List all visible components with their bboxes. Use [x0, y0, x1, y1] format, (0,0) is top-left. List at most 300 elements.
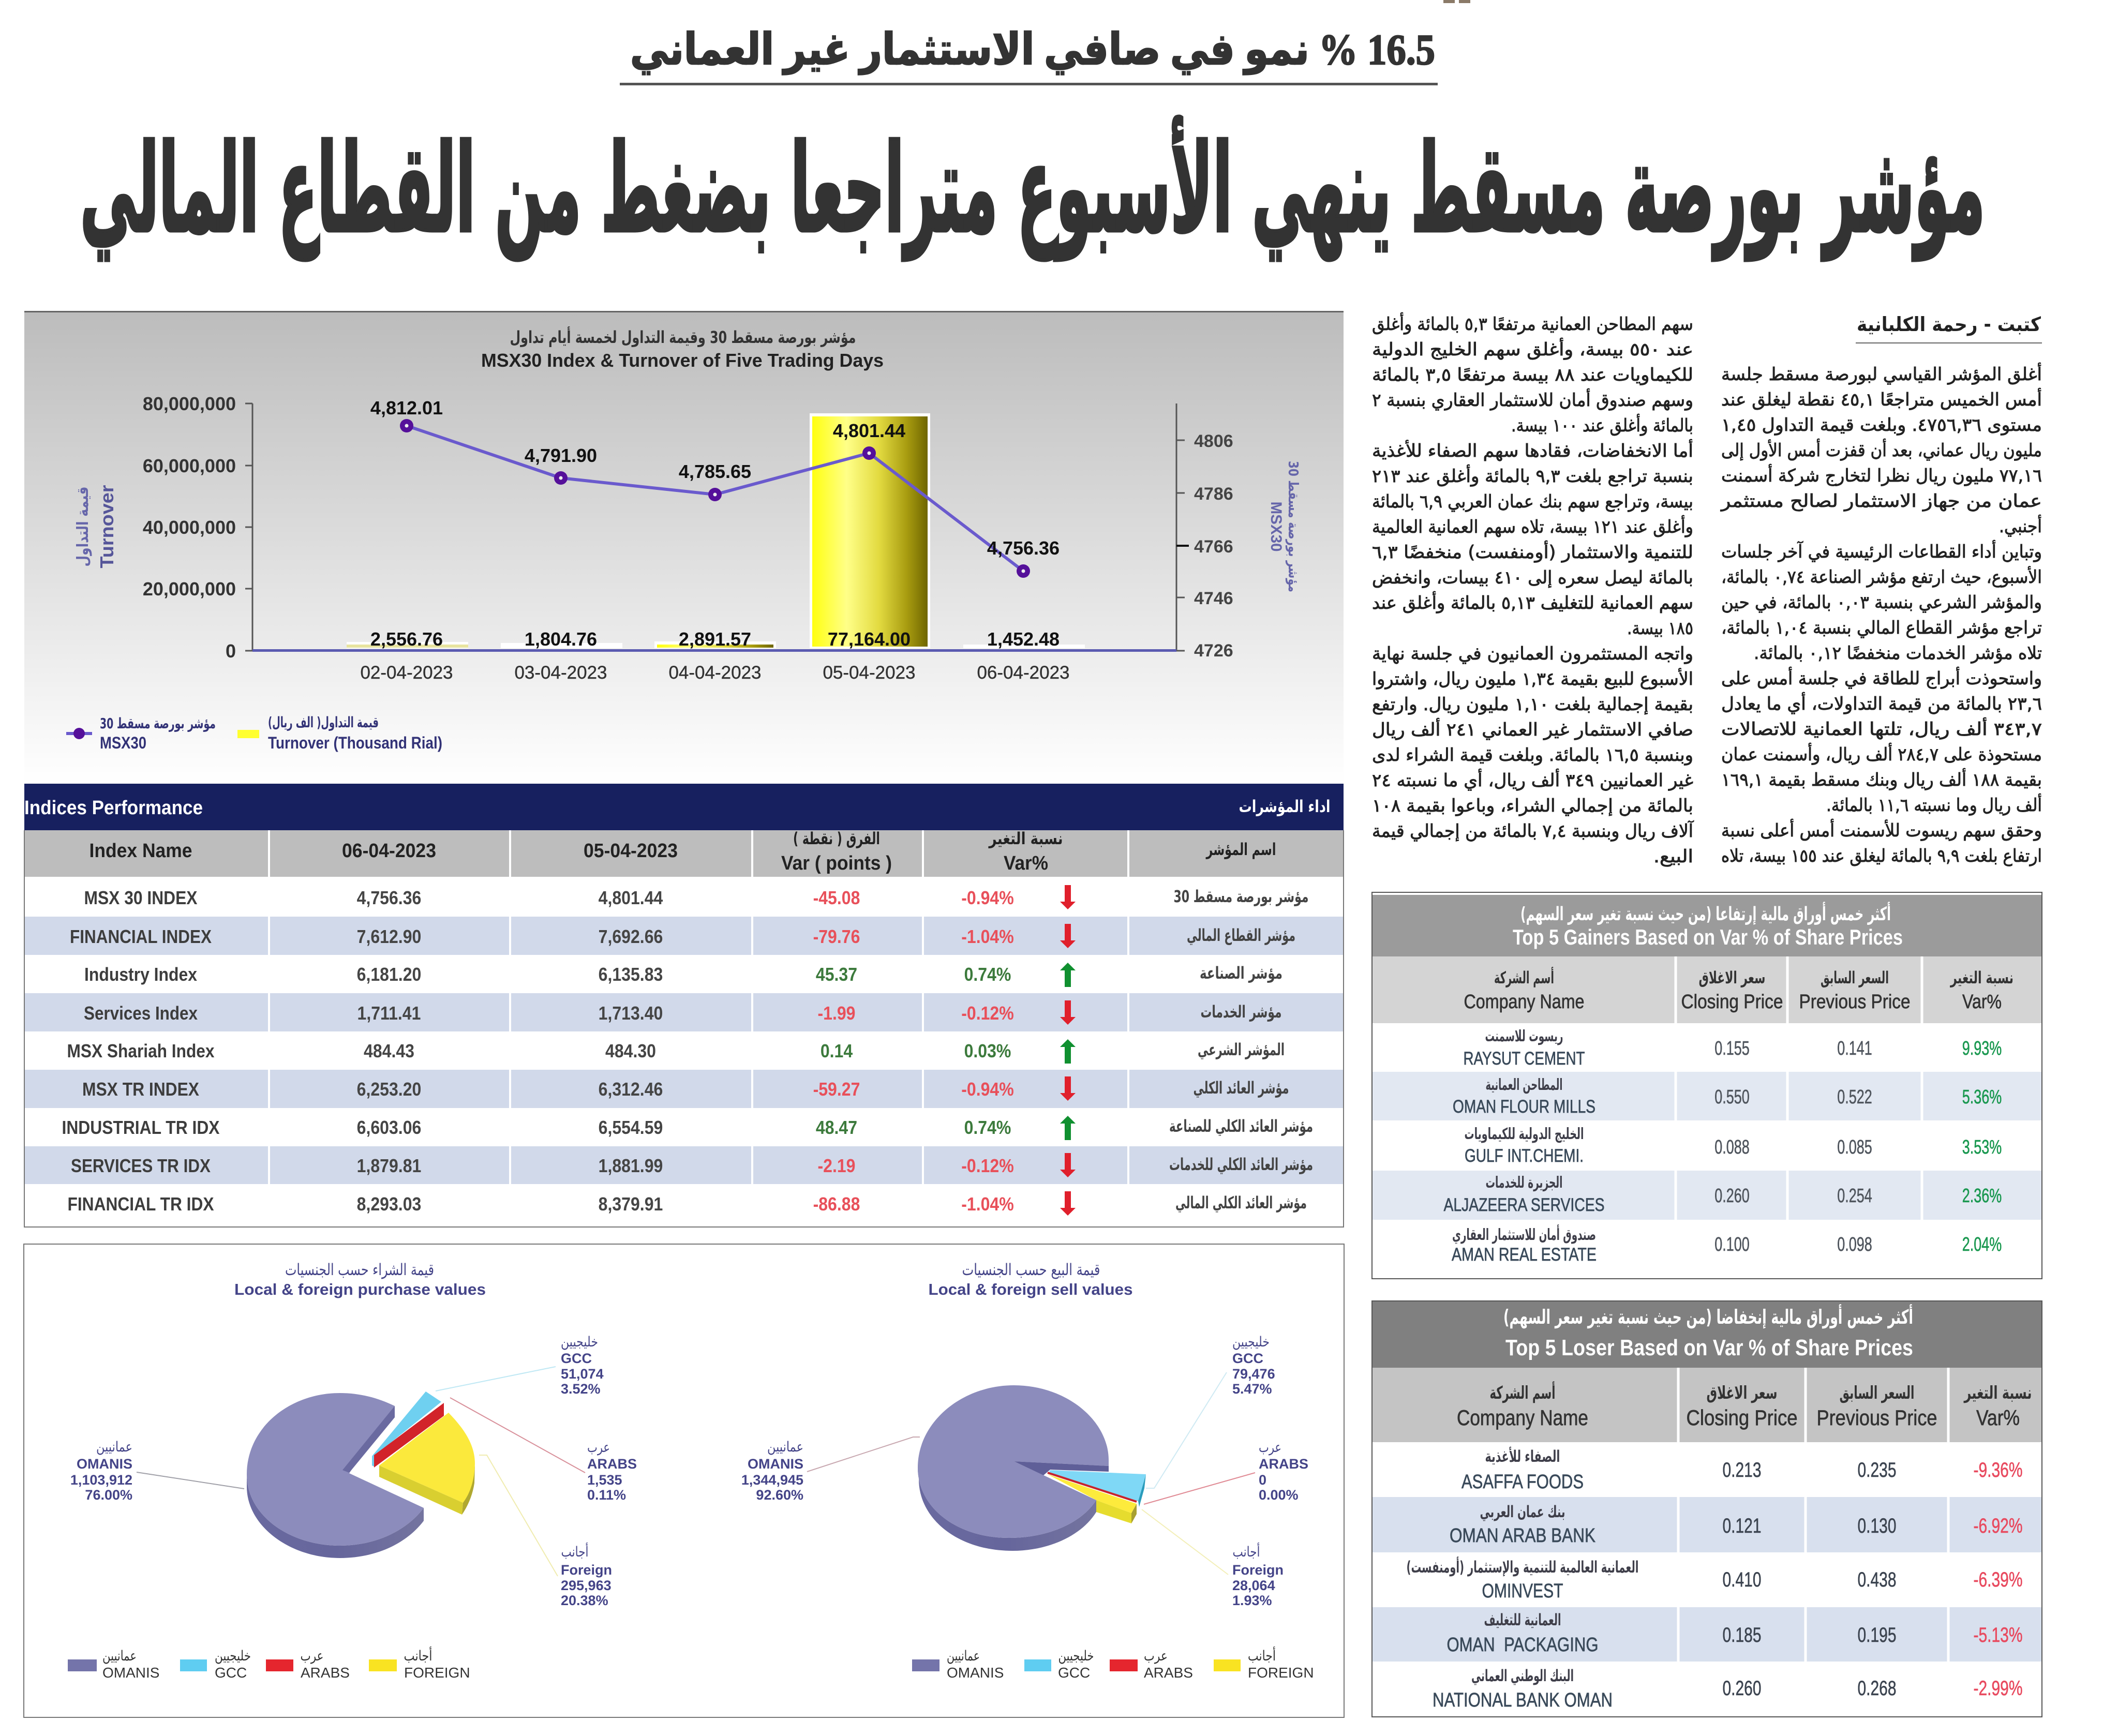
panel: indices performance table — [24, 784, 1344, 1227]
article byline: كتبت - رحمة الكلبانية — [1857, 313, 2041, 336]
purchase pie — [247, 1391, 475, 1558]
right axis: 4746 — [1194, 589, 1233, 608]
article column 1: تلاه مؤشر الخدمات منخفضًا ٠,١٢ بالمائة. — [1754, 643, 2042, 664]
gainer: Aman Real Estate — [1452, 1224, 2002, 1265]
loser: Oman Arab Bank: -6.92% — [1973, 1515, 2023, 1537]
sell heading — [928, 1261, 1133, 1298]
left axis title: قيمة التداول — [74, 486, 92, 567]
article column 2: سهم العمانية للتغليف ٥,١٣ بالمائة وأغلق عند — [1372, 591, 1693, 613]
article column 2: بالمائة ليصل سعره إلى ٤١٠ بيسات، وانخفض — [1372, 567, 1693, 588]
article column 1: واستحوذت أبراج للطاقة في جلسة أمس على — [1721, 667, 2042, 689]
gainer: Aljazeera Services: 0.260 — [1714, 1184, 1750, 1206]
article column 1: بقيمة ١٨٨ ألف ريال وبنك مسقط بقيمة ١٦٩,١ — [1721, 768, 2042, 790]
row: FINANCIAL TR IDX — [67, 1191, 1307, 1216]
article column 1: تراجع مؤشر القطاع المالي بنسبة ١,٠٤ بالمائة، — [1721, 618, 2042, 638]
article column 2 — [1372, 312, 1694, 867]
row: FINANCIAL INDEX: -79.76 — [813, 926, 860, 947]
row: MSX TR INDEX: -59.27 — [813, 1079, 860, 1100]
gainer: Oman Flour Mills — [1453, 1076, 2002, 1117]
label: Arabs sell: 0.00% — [1259, 1487, 1299, 1503]
index value labels: 4,812.01 — [370, 397, 443, 418]
row: Services Index: -0.12% — [961, 1003, 1014, 1024]
gainer: Raysut Cement: 9.93% — [1962, 1037, 2002, 1059]
sell legend — [912, 1646, 1314, 1681]
gainer: Oman Flour Mills: 0.550 — [1714, 1085, 1750, 1108]
gainer: Raysut Cement: 0.141 — [1837, 1037, 1872, 1059]
row: Services Index: Services Index — [84, 1002, 198, 1024]
label: Arabs purchase: ARABS — [587, 1456, 637, 1472]
label: Foreign purchase: أجانب — [561, 1542, 589, 1560]
table header: Var% — [1004, 852, 1048, 874]
gainers header — [1372, 956, 2042, 1023]
loser: Oman Packaging: 0.195 — [1857, 1624, 1897, 1647]
article column 1 — [1720, 363, 2042, 866]
label: Omanis purchase: 1,103,912 — [70, 1472, 132, 1488]
label: Arabs sell: ARABS — [1259, 1456, 1308, 1472]
x axis with dates: 04-04-2023 — [668, 663, 762, 683]
loser: National Bank Oman: 0.260 — [1722, 1677, 1762, 1700]
row: Services Index — [84, 1000, 1282, 1025]
article column 1: عمان من جهاز الاستثمار لصالح مستثمر — [1720, 491, 2042, 512]
row: MSX 30 INDEX: -45.08 — [813, 888, 860, 908]
row: MSX 30 INDEX — [84, 885, 1309, 909]
loser: National Bank Oman: 0.268 — [1857, 1677, 1897, 1700]
gainer: Raysut Cement — [1463, 1027, 2002, 1069]
article column 1: مستوى ٤٧٥٦,٣٦. وبلغت قيمة التداول ١,٤٥ — [1721, 415, 2042, 436]
article column 2: وبنسبة ١٦,٥ بالمائة. وبلغت قيمة الشراء لدى — [1372, 745, 1693, 766]
row: FINANCIAL INDEX: -1.04% — [961, 926, 1014, 947]
sell legend: ARABS — [1144, 1665, 1193, 1681]
gainer: Gulf Int. Chemi.: 0.085 — [1837, 1135, 1872, 1158]
label: GCC purchase: 3.52% — [561, 1381, 601, 1397]
loser: Oman Packaging: 0.185 — [1722, 1624, 1762, 1647]
label: Foreign sell: 28,064 — [1232, 1578, 1275, 1593]
label: GCC sell — [1232, 1334, 1275, 1397]
purchase heading: قيمة الشراء حسب الجنسيات — [285, 1261, 434, 1279]
loser: National Bank Oman: -2.99% — [1973, 1677, 2023, 1700]
left axis title: Turnover — [96, 485, 117, 568]
row: FINANCIAL TR IDX: 8,379.91 — [599, 1194, 663, 1215]
row: FINANCIAL INDEX: 7,692.66 — [599, 926, 663, 947]
loser: Asaffa Foods: الصفاء للأغذية — [1485, 1446, 1560, 1466]
row: MSX TR INDEX: MSX TR INDEX — [82, 1079, 199, 1100]
gainer: Aljazeera Services: 0.254 — [1837, 1184, 1872, 1206]
label: Foreign sell — [1232, 1542, 1284, 1608]
row: Industry Index: مؤشر الصناعة — [1200, 963, 1282, 983]
article column 1: الأسبوع، حيث ارتفع مؤشر الصناعة ٠,٧٤ بالمائة، — [1721, 566, 2042, 588]
article column 2: ١٨٥ بيسة. — [1627, 618, 1693, 639]
chart legend: مؤشر بورصة مسقط 30 — [100, 715, 216, 732]
row: INDUSTRIAL TR IDX: 0.74% — [964, 1117, 1011, 1138]
article column 2: للتنمية والاستثمار (أومنفست) منخفضًا ٦,٣ — [1372, 541, 1693, 563]
gainer: Aljazeera Services: 2.36% — [1962, 1184, 2002, 1206]
row: SERVICES TR IDX — [71, 1153, 1313, 1177]
gainers title — [1372, 895, 2042, 956]
row: Industry Index: 6,181.20 — [357, 964, 421, 985]
row: MSX Shariah Index: المؤشر الشرعي — [1198, 1040, 1285, 1059]
loser: Oman Arab Bank: 0.130 — [1857, 1515, 1897, 1537]
sell legend: أجانب — [1248, 1646, 1276, 1664]
label: GCC sell: خليجيين — [1232, 1334, 1270, 1350]
label: Foreign purchase: 295,963 — [561, 1578, 611, 1593]
loser: National Bank Oman: NATIONAL BANK OMAN — [1433, 1689, 1613, 1711]
row: INDUSTRIAL TR IDX: 48.47 — [816, 1117, 857, 1138]
article column 2: الأسبوع للبيع بقيمة ١,٣٤ مليون ريال، واشتروا — [1372, 668, 1693, 690]
row: FINANCIAL TR IDX: -1.04% — [961, 1194, 1014, 1215]
losers header: Previous Price — [1817, 1405, 1937, 1430]
turnover value labels: 1,452.48 — [987, 628, 1060, 650]
table header: Index Name — [89, 840, 192, 862]
gainer: Aman Real Estate: 0.100 — [1714, 1233, 1750, 1255]
row: INDUSTRIAL TR IDX: مؤشر العائد الكلي للصناعة — [1169, 1116, 1313, 1136]
row: MSX 30 INDEX: مؤشر بورصة مسقط 30 — [1173, 887, 1309, 906]
left axis: 0 — [226, 640, 236, 662]
purchase legend: GCC — [215, 1665, 247, 1681]
loser: Oman Arab Bank: OMAN ARAB BANK — [1450, 1525, 1595, 1547]
right axis — [1176, 403, 1233, 661]
gainer: Oman Flour Mills: المطاحن العمانية — [1486, 1076, 1562, 1094]
loser: National Bank Oman — [1433, 1667, 2023, 1711]
article column 2: سهم المطاحن العمانية مرتفعًا ٥,٣ بالمائة وأغلق — [1372, 312, 1693, 335]
label: Omanis sell: عمانيين — [767, 1439, 803, 1455]
row: Industry Index — [84, 963, 1282, 987]
gainer: Aljazeera Services — [1443, 1174, 2002, 1215]
row: Industry Index: 45.37 — [816, 964, 857, 985]
label: GCC sell: 5.47% — [1232, 1381, 1272, 1397]
label: Arabs sell — [1259, 1440, 1308, 1503]
losers header: نسبة التغير — [1963, 1383, 2032, 1403]
left axis title — [74, 485, 117, 568]
table title bar — [24, 784, 1344, 830]
label: Omanis sell: 1,344,945 — [741, 1472, 803, 1488]
gainer: Raysut Cement: ريسوت للاسمنت — [1485, 1027, 1563, 1045]
label: Foreign purchase: Foreign — [561, 1562, 612, 1578]
index value labels: 4,801.44 — [833, 420, 905, 441]
row: FINANCIAL TR IDX: 8,293.03 — [357, 1194, 421, 1215]
loser: Ominvest: العمانية العالمية للتنمية والإستثمار (أومنفست) — [1406, 1557, 1639, 1577]
chart legend: MSX30 — [100, 734, 146, 752]
row: MSX TR INDEX: 6,312.46 — [599, 1079, 663, 1100]
row: Industry Index: Industry Index — [84, 964, 197, 985]
losers header: Company Name — [1457, 1405, 1588, 1430]
panel: top 5 gainers — [1372, 892, 2042, 1279]
left axis: 40,000,000 — [143, 517, 236, 538]
article column 1: ارتفاع بلغت ٩,٩ بالمائة ليغلق عند ١٥٥ بيسة، تلاه — [1721, 846, 2042, 866]
index value labels: 4,756.36 — [987, 537, 1060, 559]
row: MSX 30 INDEX: 4,756.36 — [357, 888, 421, 908]
article column 2: بقيمة إجمالية بلغت ١,١٠ مليون ريال. وارتفع — [1372, 694, 1693, 715]
row: Services Index: 1,713.40 — [599, 1003, 663, 1024]
turnover value labels: 2,891.57 — [679, 628, 751, 650]
row: MSX Shariah Index — [67, 1039, 1285, 1064]
label: Omanis sell: OMANIS — [748, 1456, 803, 1472]
gainers header: نسبة التغير — [1950, 968, 2013, 987]
row: SERVICES TR IDX: SERVICES TR IDX — [71, 1155, 211, 1176]
index value labels: 4,785.65 — [679, 461, 751, 482]
gainer: Aljazeera Services: ALJAZEERA SERVICES — [1443, 1195, 1605, 1215]
gainer: Aljazeera Services: الجزيرة للخدمات — [1486, 1174, 1562, 1192]
label: Omanis purchase: OMANIS — [77, 1456, 132, 1472]
table header — [24, 829, 1344, 877]
gainer: Gulf Int. Chemi.: 3.53% — [1962, 1135, 2002, 1158]
panel: top 5 losers — [1372, 1301, 2042, 1717]
article column 2: أما الانخفاضات، فقادها سهم الصفاء للأغذية — [1372, 439, 1693, 461]
losers header: أسم الشركة — [1490, 1381, 1555, 1403]
loser: Asaffa Foods — [1461, 1446, 2023, 1493]
label: GCC purchase: 51,074 — [561, 1366, 604, 1382]
table header: الفرق ( نقطة ) — [793, 829, 880, 848]
row: FINANCIAL INDEX — [70, 924, 1295, 948]
label: Arabs purchase: عرب — [587, 1440, 610, 1456]
loser: Oman Packaging — [1446, 1611, 2023, 1656]
table header: 06-04-2023 — [342, 840, 436, 862]
article column 2: آلاف ريال وبنسبة ٧,٤ بالمائة من إجمالي قيمة — [1372, 820, 1694, 842]
purchase legend: أجانب — [404, 1646, 432, 1664]
loser: Oman Packaging: -5.13% — [1973, 1624, 2023, 1647]
gainer: Aman Real Estate: 2.04% — [1962, 1233, 2002, 1255]
sell pie — [918, 1385, 1146, 1551]
article column 1: ٢٣,٦ بالمائة من قيمة التداولات، أي ما يعادل — [1721, 692, 2042, 714]
row: MSX 30 INDEX: MSX 30 INDEX — [84, 887, 198, 908]
chart legend: قيمة التداول( الف ريال) — [268, 714, 379, 731]
article column 1: وحقق سهم ريسوت للأسمنت أمس أعلى نسبة — [1721, 819, 2042, 841]
gainer: Gulf Int. Chemi.: 0.088 — [1714, 1135, 1750, 1158]
MSX30 line — [400, 419, 1030, 578]
loser: Ominvest: 0.438 — [1857, 1568, 1897, 1591]
chart title: MSX30 Index & Turnover of Five Trading Days — [481, 350, 884, 371]
label: Arabs sell: عرب — [1259, 1440, 1281, 1456]
sell heading: قيمة البيع حسب الجنسيات — [962, 1261, 1100, 1279]
article column 2: بيسة، وتراجع سهم بنك عمان العربي ٦,٩ بالمائة — [1372, 491, 1693, 512]
row: Services Index: مؤشر الخدمات — [1200, 1002, 1282, 1022]
chart legend — [66, 714, 442, 752]
gainers header: أسم الشركة — [1494, 967, 1554, 987]
article column 2: واتجه المستثمرون العمانيون في جلسة نهاية — [1372, 643, 1693, 664]
losers header: Closing Price — [1687, 1405, 1797, 1430]
right axis title — [1267, 461, 1301, 592]
purchase legend: ARABS — [301, 1665, 350, 1681]
right axis title: مؤشر بورصة مسقط 30 — [1285, 461, 1301, 592]
loser: Ominvest: OMINVEST — [1482, 1580, 1563, 1602]
article column 2: غير العمانيين ٣٤٩ ألف ريال، أي ما نسبته ٢٤ — [1372, 769, 1693, 791]
losers title — [1372, 1301, 2042, 1368]
row: INDUSTRIAL TR IDX: 6,554.59 — [599, 1117, 663, 1138]
clipped page fragment at top edge — [1443, 0, 1470, 3]
article column 1: ألف ريال وما نسبته ١١,٦ بالمائة. — [1826, 794, 2042, 816]
losers header — [1372, 1368, 2042, 1442]
row: INDUSTRIAL TR IDX — [62, 1116, 1313, 1140]
x axis with dates: 06-04-2023 — [977, 663, 1070, 683]
gainer: Oman Flour Mills: 0.522 — [1837, 1085, 1872, 1108]
article column 1: أجنبي. — [1999, 515, 2042, 537]
row: MSX TR INDEX — [82, 1076, 1289, 1101]
table header: اسم المؤشر — [1205, 840, 1276, 859]
right axis: 4786 — [1194, 484, 1233, 504]
loser: Oman Packaging: العمانية للتغليف — [1484, 1611, 1561, 1629]
gainer: Aman Real Estate: AMAN REAL ESTATE — [1452, 1245, 1597, 1265]
article column 2: عند ٥٥٠ بيسة، وأغلق سهم الخليج الدولية — [1372, 338, 1693, 360]
article column 2: بالمائة وأغلق عند ١٠٠ بيسة. — [1511, 414, 1693, 436]
label: Arabs sell: 0 — [1259, 1472, 1266, 1488]
loser: Asaffa Foods: 0.235 — [1857, 1459, 1897, 1481]
row: SERVICES TR IDX: 1,881.99 — [599, 1156, 663, 1176]
loser: Oman Arab Bank: 0.121 — [1722, 1515, 1762, 1537]
loser: Asaffa Foods: 0.213 — [1722, 1459, 1762, 1481]
label: GCC sell: GCC — [1232, 1351, 1263, 1366]
loser: Oman Arab Bank — [1450, 1503, 2023, 1547]
right axis: 4766 — [1194, 537, 1233, 557]
losers title: Top 5 Loser Based on Var % of Share Prices — [1505, 1335, 1913, 1360]
index value labels: 4,791.90 — [525, 445, 597, 466]
row: FINANCIAL INDEX: 7,612.90 — [357, 926, 421, 947]
article column 1: وتباين أداء القطاعات الرئيسية في آخر جلسات — [1721, 540, 2042, 562]
article column 2: صافي الاستثمار غير العماني ٢٤١ ألف ريال — [1372, 718, 1693, 740]
row: SERVICES TR IDX: 1,879.81 — [357, 1156, 421, 1176]
turnover value labels: 2,556.76 — [370, 628, 443, 650]
label: Omanis purchase — [70, 1439, 132, 1503]
gainers header: Previous Price — [1799, 991, 1910, 1013]
row: FINANCIAL TR IDX: -86.88 — [813, 1194, 860, 1215]
label: Foreign sell: 1.93% — [1232, 1593, 1272, 1608]
left axis — [143, 393, 252, 662]
chart title: مؤشر بورصة مسقط 30 وقيمة التداول لخمسة أيام تداول — [510, 326, 856, 347]
row: FINANCIAL INDEX: مؤشر القطاع المالي — [1187, 925, 1295, 945]
row: FINANCIAL TR IDX: FINANCIAL TR IDX — [67, 1193, 214, 1215]
purchase legend: OMANIS — [102, 1665, 159, 1681]
purchase legend: عمانيين — [102, 1648, 137, 1664]
label: Omanis purchase: عمانيين — [96, 1439, 132, 1455]
loser: Ominvest: 0.410 — [1722, 1568, 1762, 1591]
loser: Oman Arab Bank: بنك عمان العربي — [1480, 1503, 1565, 1521]
article column 2: البيع. — [1653, 846, 1693, 867]
sell legend: GCC — [1058, 1665, 1090, 1681]
left axis: 80,000,000 — [143, 393, 236, 414]
label: Omanis purchase: 76.00% — [85, 1487, 132, 1503]
right axis title: MSX30 — [1267, 502, 1285, 551]
label: GCC purchase: GCC — [561, 1351, 592, 1366]
sell legend: OMANIS — [947, 1665, 1004, 1681]
label: Arabs purchase: 0.11% — [587, 1487, 626, 1503]
gainers header: سعر الاغلاق — [1699, 968, 1765, 987]
row: Services Index: 1,711.41 — [357, 1003, 421, 1024]
row: MSX Shariah Index: 0.14 — [821, 1041, 853, 1061]
gainer: Raysut Cement: 0.155 — [1714, 1037, 1750, 1059]
label: GCC purchase — [561, 1334, 604, 1397]
row: FINANCIAL INDEX: FINANCIAL INDEX — [70, 926, 212, 947]
label: Foreign purchase — [561, 1542, 612, 1608]
losers header: السعر السابق — [1840, 1383, 1914, 1403]
panel: nationality pie charts — [24, 1244, 1344, 1717]
label: Foreign sell: Foreign — [1232, 1562, 1284, 1578]
gainers header: Closing Price — [1681, 991, 1783, 1013]
article column 1: ٣٤٣,٧ ألف ريال، تلتها العمانية للاتصالات — [1721, 717, 2042, 740]
gainer: Aman Real Estate: 0.098 — [1837, 1233, 1872, 1255]
row: MSX TR INDEX: مؤشر العائد الكلي — [1193, 1078, 1289, 1098]
gainer: Aman Real Estate: صندوق أمان للاستثمار العقاري — [1452, 1224, 1596, 1244]
index value labels — [370, 397, 1060, 559]
gainer: Gulf Int. Chemi.: الخليج الدولية للكيماويات — [1464, 1125, 1584, 1143]
article column 2: بالمائة من إجمالي الشراء، وباعوا بقيمة ١٠٨ — [1372, 796, 1693, 816]
label: Omanis sell: 92.60% — [756, 1487, 803, 1503]
article column 2: للكيماويات عند ٨٨ بيسة مرتفعًا ٣,٥ بالمائة — [1372, 365, 1693, 385]
table header: 05-04-2023 — [584, 840, 678, 862]
x axis with dates: 03-04-2023 — [514, 663, 607, 683]
right axis: 4806 — [1194, 431, 1233, 451]
purchase legend: عرب — [300, 1648, 324, 1664]
row: MSX 30 INDEX: 4,801.44 — [599, 888, 663, 908]
row: MSX Shariah Index: 484.30 — [605, 1041, 656, 1061]
turnover bars — [347, 413, 1085, 648]
loser: Oman Packaging: OMAN PACKAGING — [1446, 1634, 1599, 1656]
row: MSX Shariah Index: MSX Shariah Index — [67, 1040, 214, 1061]
subtitle: 16.5 % نمو في صافي الاستثمار غير العماني — [630, 26, 1435, 75]
row: SERVICES TR IDX: -0.12% — [961, 1156, 1014, 1176]
purchase leader lines — [137, 1367, 585, 1576]
chart title — [481, 326, 884, 371]
table title bar: اداء المؤشرات — [1239, 797, 1331, 816]
gainers title: أكثر خمس أوراق مالية إرتفاعا (من حيث نسبة تغير سعر السهم) — [1520, 902, 1891, 925]
table title bar: Indices Performance — [24, 797, 203, 819]
gainer: Gulf Int. Chemi.: GULF INT.CHEMI. — [1465, 1146, 1584, 1166]
row: MSX Shariah Index: 0.03% — [964, 1041, 1011, 1061]
article column 1: ٧٧,١٦ مليون ريال نظرا لتخارج شركة أسمنت — [1721, 464, 2042, 486]
purchase legend — [68, 1646, 470, 1681]
left axis: 20,000,000 — [143, 578, 236, 600]
loser: Ominvest: -6.39% — [1973, 1568, 2023, 1591]
turnover value labels: 77,164.00 — [828, 628, 911, 650]
article column 1: مليون ريال عماني، بعد أن قفزت أمس الأول إلى — [1721, 439, 2042, 461]
gainers title: Top 5 Gainers Based on Var % of Share Prices — [1513, 925, 1903, 949]
x axis with dates: 02-04-2023 — [360, 663, 453, 683]
article column 2: وسهم صندوق أمان للاستثمار العقاري بنسبة ٢ — [1372, 388, 1693, 411]
label: GCC purchase: خليجيين — [561, 1334, 598, 1350]
article column 1: أمس الخميس متراجعًا ٤٥,١ نقطة ليغلق عند — [1721, 388, 2042, 410]
loser: National Bank Oman: البنك الوطني العماني — [1471, 1667, 1574, 1685]
sell heading: Local & foreign sell values — [928, 1280, 1133, 1298]
article column 1: مستحوذة على ٢٨٤,٧ ألف ريال، وأسمنت عمان — [1721, 743, 2042, 765]
sell legend: عمانيين — [947, 1648, 980, 1664]
x axis with dates — [252, 649, 1176, 683]
turnover value labels — [370, 628, 1060, 650]
loser: Ominvest — [1406, 1557, 2023, 1602]
chart: sell values — [741, 1261, 1314, 1681]
row: FINANCIAL TR IDX: مؤشر العائد الكلي المالي — [1175, 1193, 1307, 1213]
row: SERVICES TR IDX: مؤشر العائد الكلي للخدمات — [1169, 1155, 1313, 1174]
turnover value labels: 1,804.76 — [525, 628, 597, 650]
chart: purchase values — [68, 1261, 637, 1681]
label: GCC sell: 79,476 — [1232, 1366, 1275, 1382]
sell leader lines — [807, 1372, 1255, 1575]
article column 2: وأغلق عند ١٢١ بيسة، تلاه سهم العمانية العالمية — [1372, 515, 1693, 537]
row: Services Index: -1.99 — [818, 1003, 855, 1024]
left axis: 60,000,000 — [143, 455, 236, 476]
losers header: سعر الاغلاق — [1706, 1383, 1778, 1403]
panel: MSX30 chart — [24, 311, 1344, 784]
label: Foreign sell: أجانب — [1232, 1542, 1260, 1560]
label: Omanis sell — [741, 1439, 803, 1503]
article column 1: أغلق المؤشر القياسي لبورصة مسقط جلسة — [1721, 363, 2042, 385]
gainer: Raysut Cement: RAYSUT CEMENT — [1463, 1049, 1585, 1069]
row: MSX 30 INDEX: -0.94% — [961, 888, 1014, 908]
row: Industry Index: 6,135.83 — [599, 964, 663, 985]
sell legend: FOREIGN — [1248, 1665, 1314, 1681]
label: Arabs purchase: 1,535 — [587, 1472, 622, 1488]
gainers header: السعر السابق — [1821, 968, 1889, 987]
purchase heading — [234, 1261, 486, 1298]
gainers header: Var% — [1962, 991, 2002, 1013]
purchase heading: Local & foreign purchase values — [234, 1280, 486, 1298]
row: MSX TR INDEX: 6,253.20 — [357, 1079, 421, 1100]
